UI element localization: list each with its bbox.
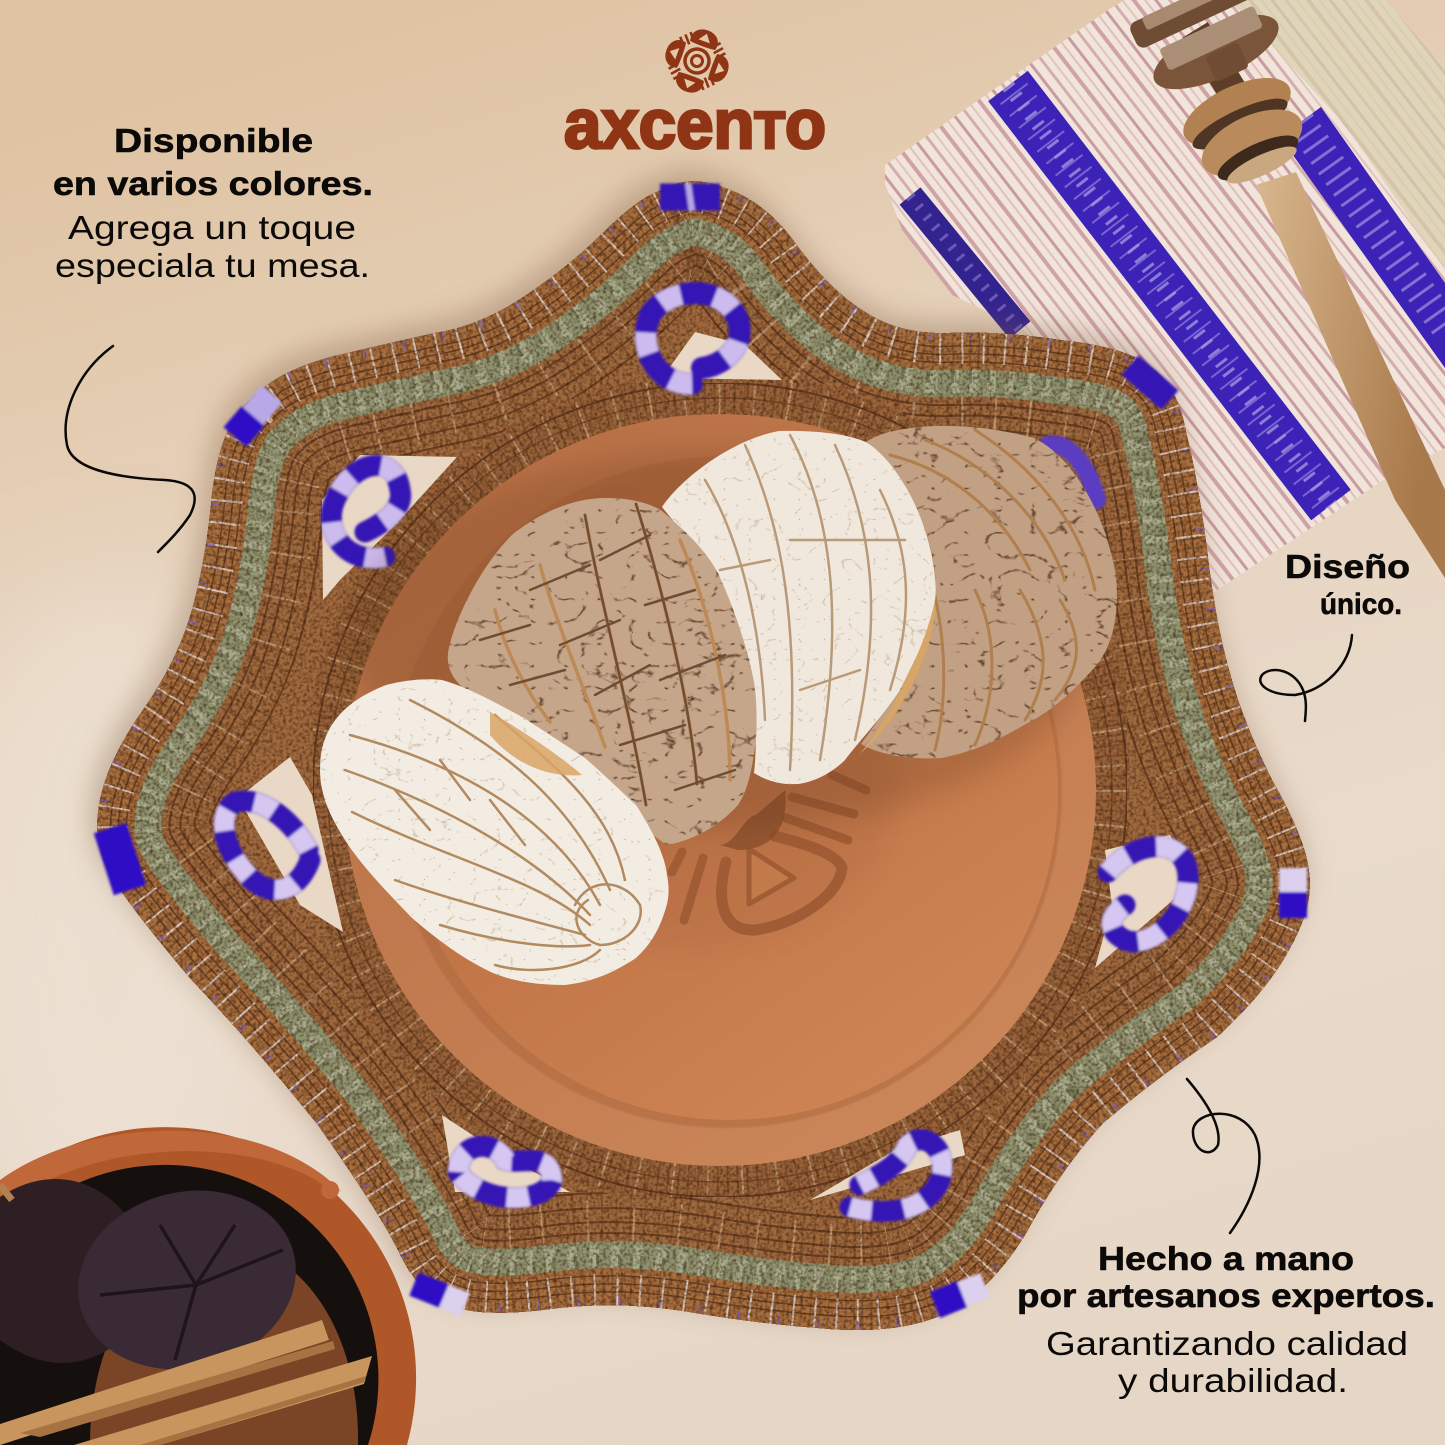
text block: disponible en varios colores	[53, 122, 373, 284]
ring top right	[1048, 444, 1097, 500]
molinillo top gear	[1128, 0, 1266, 50]
axcento logo	[564, 20, 826, 163]
inner basket ring	[313, 383, 1127, 1197]
ring left	[331, 465, 401, 558]
concha white center	[662, 431, 936, 784]
clay bowl with chocolate	[0, 1127, 416, 1445]
molinillo gear	[1143, 0, 1289, 104]
ring bottom right	[850, 1140, 942, 1211]
wooden molinillo	[1128, 0, 1445, 578]
text block: diseño único: único.	[1320, 588, 1402, 621]
logo wordmark: axcenTo	[564, 85, 826, 163]
pan dulce shadow	[350, 450, 1090, 830]
plate center shadow	[480, 610, 900, 950]
molinillo disc lower	[1192, 96, 1312, 190]
concha honey patch	[490, 712, 582, 775]
purple thread bands	[110, 183, 1293, 1305]
concha white front	[320, 679, 669, 985]
second blue stripe	[1280, 107, 1445, 368]
squiggle arrow bottom	[1187, 1079, 1259, 1233]
text block: disponible en varios colores: Disponible	[114, 122, 313, 159]
text block: disponible en varios colores: Agrega un toque	[68, 209, 356, 246]
clay plate	[344, 414, 1096, 1166]
text block: disponible en varios colores: en varios colores.	[53, 165, 373, 202]
text block: hecho a mano: y durabilidad.	[1118, 1362, 1348, 1399]
plate engraved mark	[672, 775, 866, 930]
ring right	[1108, 846, 1188, 942]
chocolate back tablet	[0, 1179, 157, 1363]
concha tan right	[861, 426, 1117, 758]
bowl interior	[90, 1245, 358, 1445]
text block: hecho a mano: Hecho a mano	[1098, 1240, 1354, 1277]
logo flower mark	[656, 20, 738, 102]
molinillo disc upper	[1173, 64, 1301, 160]
folded blue stripe	[910, 196, 1020, 330]
text block: disponible en varios colores: especiala tu mesa.	[55, 247, 370, 284]
basket shadow	[91, 171, 1304, 1320]
chocolate front tablet	[59, 1168, 315, 1392]
concha tan center	[448, 498, 757, 845]
inner coil band	[208, 303, 1198, 1219]
text block: hecho a mano: Garantizando calidad	[1046, 1325, 1408, 1362]
text block: hecho a mano: por artesanos expertos.	[1017, 1277, 1435, 1314]
outer coil band	[97, 181, 1310, 1330]
ring top	[646, 293, 740, 384]
ring lower left	[224, 801, 310, 890]
purple ring loops	[224, 293, 1188, 1211]
ring bottom left	[458, 1146, 552, 1198]
text block: diseño único: Diseño	[1285, 548, 1410, 585]
bowl handle bump	[321, 1181, 339, 1199]
plate dark engraved arc	[720, 790, 786, 850]
basket openings	[238, 332, 1196, 1200]
main blue stripe	[1008, 86, 1331, 505]
squiggle arrow left	[66, 346, 195, 552]
background light patch	[0, 580, 280, 1220]
molinillo shaft	[1195, 30, 1250, 120]
text block: hecho a mano	[1017, 1240, 1435, 1399]
text block: diseño único	[1285, 548, 1410, 621]
cloth napkin	[885, 0, 1445, 598]
cinnamon sticks	[0, 1320, 372, 1445]
squiggle arrow right	[1260, 635, 1352, 721]
green braid	[134, 218, 1273, 1293]
pine needle basket	[97, 181, 1310, 1330]
